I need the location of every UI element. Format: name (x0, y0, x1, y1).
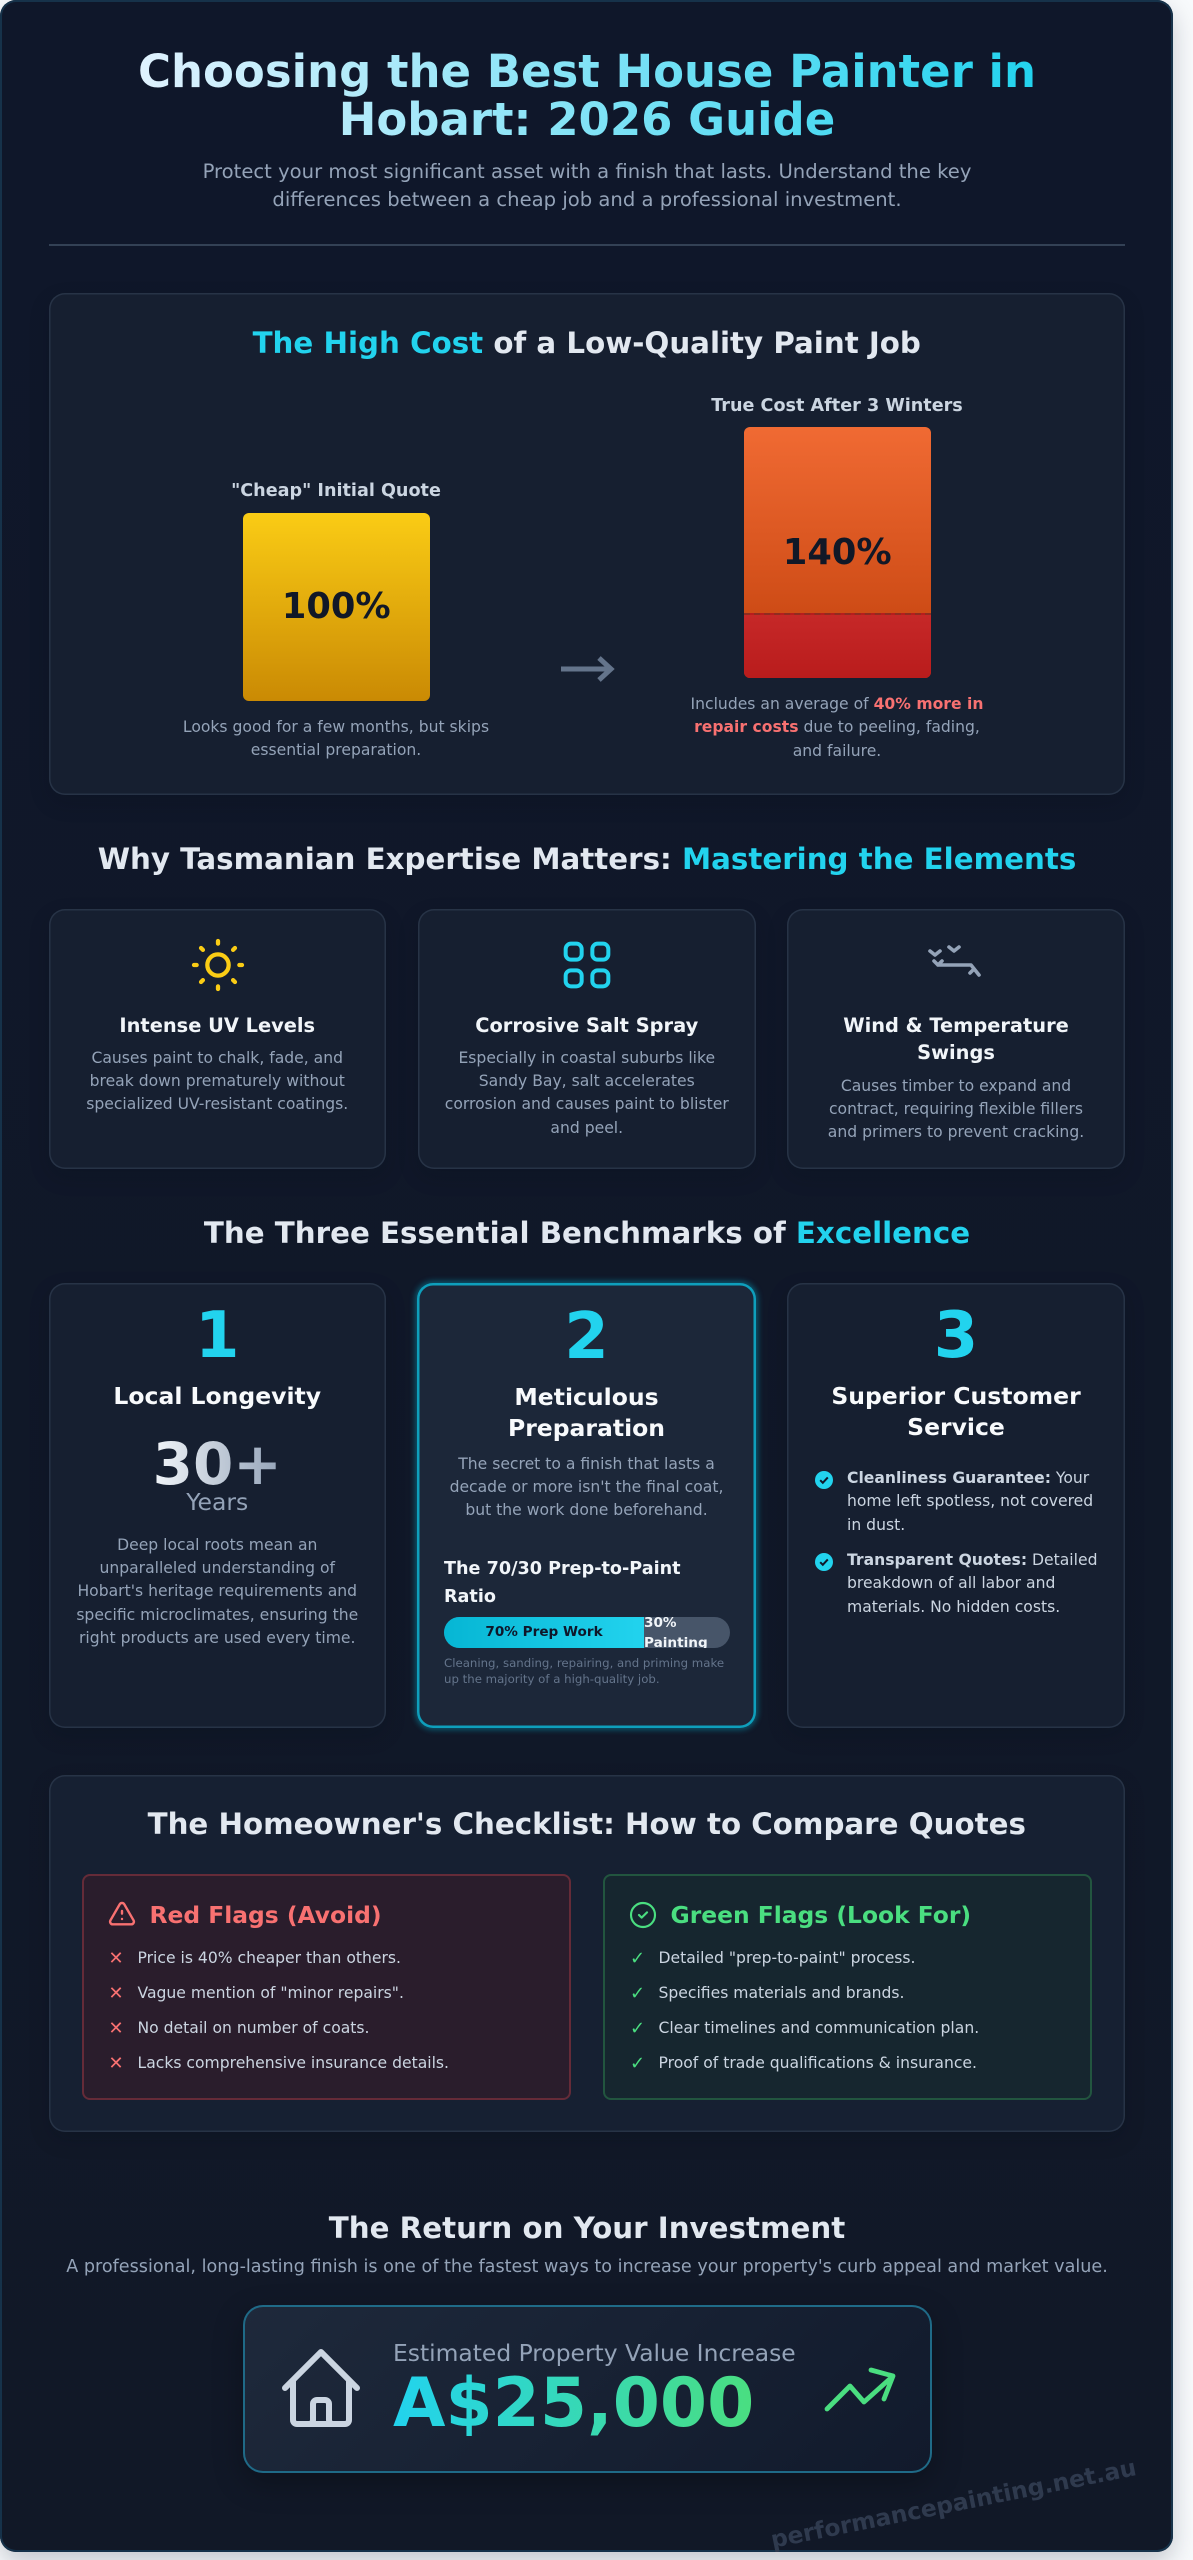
card: meticulous preparation (417, 1283, 756, 1728)
icon: check circle (630, 1902, 656, 1928)
card text: specialized UV-resistant coatings. (86, 1095, 348, 1113)
description: true cost (691, 695, 983, 760)
number 1: 1 (195, 1299, 240, 1373)
segment: 70 percent: 70% Prep Work (485, 1624, 603, 1640)
stat: 30+: 30+ (153, 1430, 282, 1498)
card title: Preparation (508, 1414, 665, 1442)
green item 4: ✓ (630, 2053, 645, 2074)
heading: checklist: The Homeowner's Checklist: How to Compare Quotes (148, 1807, 1026, 1841)
column: true cost (691, 396, 983, 760)
segment: 70 percent (444, 1617, 644, 1648)
value: A$25,000 (393, 2363, 754, 2442)
bar: 100 percent: 100% (282, 586, 391, 627)
icon: sun (192, 938, 244, 992)
text: in dust. (847, 1516, 905, 1534)
chart: 70/30 ratio bar (444, 1617, 730, 1648)
description: cheap quote (183, 718, 489, 759)
segment: 30 percent (644, 1617, 708, 1648)
card title (831, 1382, 1081, 1440)
text: home left spotless, not covered (847, 1492, 1093, 1510)
card title: Intense UV Levels (119, 1014, 315, 1037)
card text: corrosion and causes paint to blister (445, 1095, 729, 1113)
chart note: up the majority of a high-quality job. (444, 1672, 660, 1686)
icon: house (272, 2340, 368, 2436)
title (138, 45, 1036, 146)
arrow (561, 656, 614, 682)
text: Transparent Quotes: Detailed (847, 1551, 1097, 1569)
card text: Especially in coastal suburbs like (458, 1048, 715, 1066)
green flags box (603, 1874, 1092, 2100)
red item 2: ✕ (108, 1983, 124, 2004)
card: local longevity (48, 1283, 386, 1728)
value: 140 percent: 140% (783, 532, 892, 573)
text: breakdown of all labor and (847, 1574, 1055, 1592)
subtitle: differences between a cheap job and a professional investment. (272, 188, 902, 210)
description: true cost: Includes an average of 40% more in (691, 695, 983, 713)
column: cheap initial quote (183, 481, 489, 759)
ratio title: Ratio (444, 1586, 496, 1606)
heading: return on investment: The Return on Your Investment (329, 2211, 845, 2245)
card text: Causes paint to chalk, fade, and (91, 1048, 343, 1066)
green item 3: Clear timelines and communication plan. (658, 2019, 979, 2037)
green flags title: Green Flags (Look For) (670, 1901, 971, 1929)
list item: cleanliness (815, 1469, 1093, 1534)
card text: decade or more isn't the final coat, (450, 1478, 723, 1496)
text: Cleanliness Guarantee: Your (847, 1469, 1089, 1487)
card title: Swings (917, 1041, 995, 1064)
card text (76, 1536, 358, 1647)
card text: Deep local roots mean an (117, 1536, 317, 1554)
ratio title: The 70/30 Prep-to-Paint (444, 1558, 681, 1578)
heading: benchmarks: The Three Essential Benchmarks of Excellence (204, 1216, 970, 1250)
title: Hobart: 2026 Guide (339, 93, 835, 146)
label: Estimated Property Value Increase (393, 2339, 796, 2367)
card title: Corrosive Salt Spray (475, 1014, 698, 1037)
red item 1: ✕ (108, 1948, 124, 1969)
heading: Tasmanian expertise: Why Tasmanian Expertise Matters: Mastering the Elements (98, 842, 1076, 876)
description: true cost: repair costs due to peeling, fading, (694, 718, 980, 736)
chart note (444, 1656, 724, 1686)
card text: Sandy Bay, salt accelerates (479, 1072, 695, 1090)
value callout (242, 2305, 932, 2473)
description: true cost: and failure. (793, 742, 881, 760)
label: true cost: True Cost After 3 Winters (711, 396, 963, 416)
red item 2: Vague mention of "minor repairs". (138, 1984, 404, 2002)
red flags box (82, 1874, 571, 2100)
label: cheap quote: "Cheap" Initial Quote (231, 481, 441, 501)
card text: right products are used every time. (79, 1629, 355, 1647)
card text (86, 1048, 348, 1113)
card text: but the work done beforehand. (465, 1501, 708, 1519)
card text: Hobart's heritage requirements and (77, 1582, 357, 1600)
text (847, 1551, 1097, 1616)
red item 3: No detail on number of coats. (138, 2019, 370, 2037)
card title (508, 1382, 665, 1442)
description: cheap quote: Looks good for a few months, but skips (183, 718, 489, 736)
card: UV levels (48, 909, 386, 1169)
card text: The secret to a finish that lasts a (458, 1454, 715, 1472)
green item 2: ✓ (630, 1983, 645, 2004)
green item 3: ✓ (630, 2018, 645, 2039)
green item 4 (605, 2052, 1085, 2075)
card title: Superior Customer (831, 1382, 1081, 1410)
green item 2: Specifies materials and brands. (658, 1984, 904, 2002)
card text (450, 1454, 723, 1519)
card: customer service (787, 1283, 1125, 1728)
watermark: performancepainting.net.au (768, 2453, 1139, 2552)
card title: Service (907, 1412, 1005, 1440)
description: cheap quote: essential preparation. (251, 741, 421, 759)
number 3: 3 (934, 1299, 978, 1373)
red item 1: Price is 40% cheaper than others. (138, 1949, 401, 1967)
card title: Wind & Temperature (843, 1014, 1069, 1036)
green item 1: ✓ (630, 1948, 645, 1969)
icon: trending up (813, 2360, 913, 2420)
icon: check (815, 1553, 833, 1571)
card text: Causes timber to expand and (841, 1076, 1071, 1094)
card text: and primers to prevent cracking. (828, 1123, 1084, 1141)
title: Choosing the Best House Painter in (138, 45, 1036, 98)
subtitle (203, 160, 971, 210)
red item 4: Lacks comprehensive insurance details. (138, 2054, 449, 2072)
text: materials. No hidden costs. (847, 1598, 1060, 1616)
card title: Meticulous (514, 1382, 659, 1410)
heading: high cost: The High Cost of a Low-Quality Paint Job (253, 326, 921, 360)
card text: specific microclimates, ensuring the (76, 1606, 358, 1624)
bar: 100 percent (242, 513, 430, 701)
icon: wind (928, 945, 981, 977)
card: wind and temperature (787, 909, 1125, 1169)
icon: grid (564, 942, 610, 988)
chart note: Cleaning, sanding, repairing, and priming make (444, 1656, 724, 1670)
green item 4: Proof of trade qualifications & insurance. (658, 2054, 977, 2072)
repair cost segment (744, 613, 931, 678)
green item 1: Detailed "prep-to-paint" process. (658, 1949, 916, 1967)
ratio title (444, 1558, 681, 1606)
icon: check (815, 1471, 833, 1489)
card title: Local Longevity (113, 1382, 321, 1410)
red item 3: ✕ (108, 2018, 124, 2039)
card text: and peel. (550, 1119, 623, 1137)
text: return on investment: A professional, long-lasting finish is one of the fastest ways to increase your property's curb appeal and market value. (66, 2257, 1108, 2277)
red flags title: Red Flags (Avoid) (150, 1901, 382, 1929)
list item: quotes (815, 1551, 1097, 1616)
card text (445, 1048, 729, 1137)
red item 4: ✕ (108, 2053, 124, 2074)
card title (843, 1014, 1069, 1064)
number 2: 2 (564, 1300, 609, 1374)
stat unit: Years (186, 1488, 248, 1516)
card text: break down prematurely without (90, 1072, 345, 1090)
text (847, 1469, 1093, 1534)
panel: high cost of low quality paint job (48, 293, 1125, 795)
panel: homeowner checklist (48, 1775, 1125, 2132)
bar: 140 percent (744, 427, 931, 678)
card text (828, 1076, 1084, 1141)
card text: contract, requiring flexible fillers (829, 1100, 1083, 1118)
card: salt spray (418, 909, 756, 1169)
icon: warning (108, 1902, 136, 1926)
card text: unparalleled understanding of (99, 1559, 335, 1577)
subtitle: Protect your most significant asset with a finish that lasts. Understand the key (203, 160, 971, 183)
